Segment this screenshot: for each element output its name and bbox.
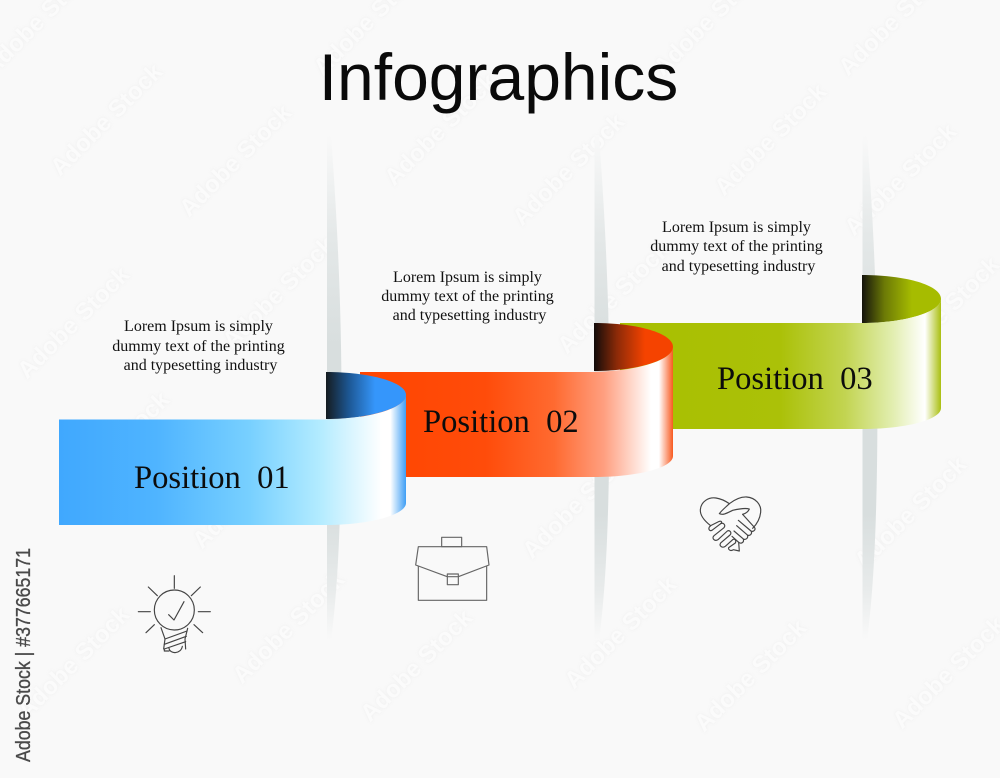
watermark pattern: Adobe Stock [517, 441, 641, 564]
watermark pattern: Adobe Stock [849, 451, 973, 574]
ribbon: position 02: Position 02 [423, 404, 579, 440]
watermark pattern: Adobe Stock [12, 261, 136, 384]
text block: position 02: and typesetting industry [393, 307, 546, 324]
ribbon: position 03: Position 03 [717, 361, 873, 397]
watermark pattern: Adobe Stock [174, 99, 298, 222]
watermark pattern: Adobe Stock [217, 231, 341, 354]
vertical divider stripes [327, 135, 878, 640]
watermark pattern: Adobe Stock [187, 431, 311, 554]
ribbon: position 02 [360, 323, 673, 477]
ribbon: position 01: Position 01 [134, 460, 290, 496]
watermark pattern: Adobe Stock [379, 68, 503, 191]
watermark pattern: Adobe Stock [227, 566, 351, 689]
text block: position 03: Lorem Ipsum is simply [662, 219, 811, 236]
watermark pattern: Adobe Stock [507, 108, 631, 231]
icon: light bulb with check [138, 576, 210, 653]
ribbon: position 03 [620, 275, 941, 429]
watermark pattern: Adobe Stock [12, 601, 136, 724]
text block: position 02: dummy text of the printing [381, 288, 554, 305]
watermark pattern: Adobe Stock [552, 236, 676, 359]
text block: position 03: dummy text of the printing [650, 238, 823, 255]
watermark pattern: Adobe Stock [52, 386, 176, 509]
text block: position 01: Lorem Ipsum is simply [124, 318, 273, 335]
watermark pattern: Adobe Stock [559, 571, 683, 694]
watermark pattern: Adobe Stock [45, 58, 169, 181]
watermark pattern: Adobe Stock [355, 604, 479, 727]
title: Infographics [319, 40, 678, 114]
text block: position 01: and typesetting industry [124, 357, 277, 374]
text block: position 01: dummy text of the printing [112, 338, 285, 355]
text block: position 02: Lorem Ipsum is simply [393, 269, 542, 286]
watermark pattern: Adobe Stock [839, 118, 963, 241]
watermark pattern: Adobe Stock [709, 78, 833, 201]
ribbon: position 01 [59, 372, 406, 525]
watermark pattern: Adobe Stock [689, 614, 813, 737]
stock id side label: Adobe Stock | #377665171 [13, 548, 35, 762]
icon: handshake heart [700, 497, 761, 551]
icon: briefcase [416, 537, 489, 600]
text block: position 03: and typesetting industry [662, 258, 815, 275]
